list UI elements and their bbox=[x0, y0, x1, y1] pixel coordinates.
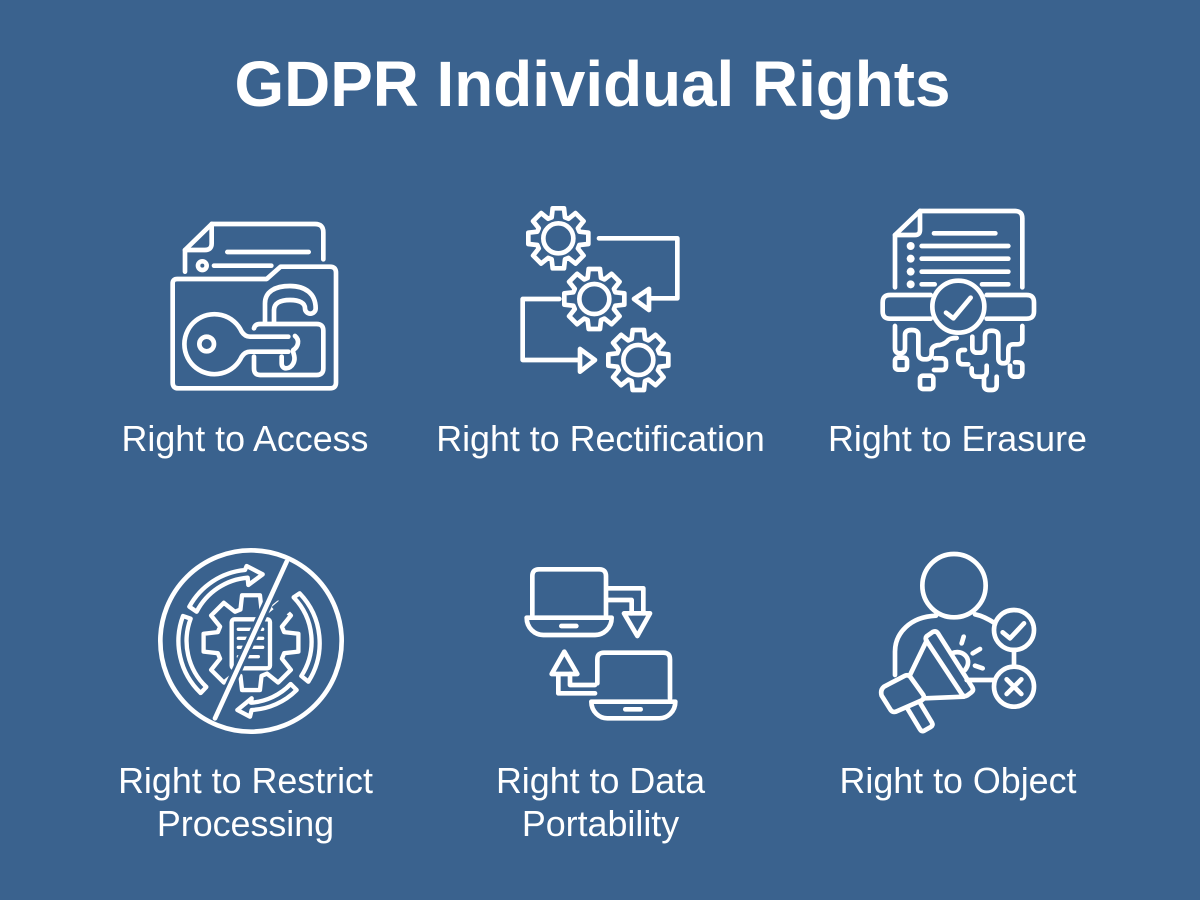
icon: document shredder with check bbox=[883, 211, 1034, 390]
label: right to object: Right to Object bbox=[840, 761, 1077, 801]
panel: right to rectification bbox=[436, 208, 765, 459]
title: GDPR Individual Rights bbox=[235, 48, 950, 120]
icon dots: document bullets bbox=[907, 242, 915, 288]
panel: right to erasure bbox=[828, 211, 1087, 459]
icon: person with megaphone and choices bbox=[881, 554, 1034, 731]
icon: folder with key and open lock bbox=[173, 224, 336, 388]
label: right to data portability: Portability bbox=[522, 804, 679, 844]
panel: right to object bbox=[840, 554, 1077, 801]
label: right to restrict processing: Processing bbox=[157, 804, 334, 844]
icon: prohibited process gear bbox=[160, 550, 342, 732]
label: right to data portability: Right to Data bbox=[496, 761, 705, 801]
label: right to restrict processing: Right to Restrict bbox=[118, 761, 373, 801]
icon: two laptops exchanging data bbox=[527, 569, 675, 718]
panel: right to access bbox=[122, 224, 368, 459]
panel: right to data portability bbox=[496, 569, 705, 844]
label: right to rectification: Right to Rectification bbox=[436, 419, 765, 459]
label: right to access: Right to Access bbox=[122, 419, 368, 459]
label: right to erasure: Right to Erasure bbox=[828, 419, 1087, 459]
panel: right to restrict processing bbox=[118, 550, 373, 844]
icon: gears with arrows bbox=[523, 208, 677, 390]
